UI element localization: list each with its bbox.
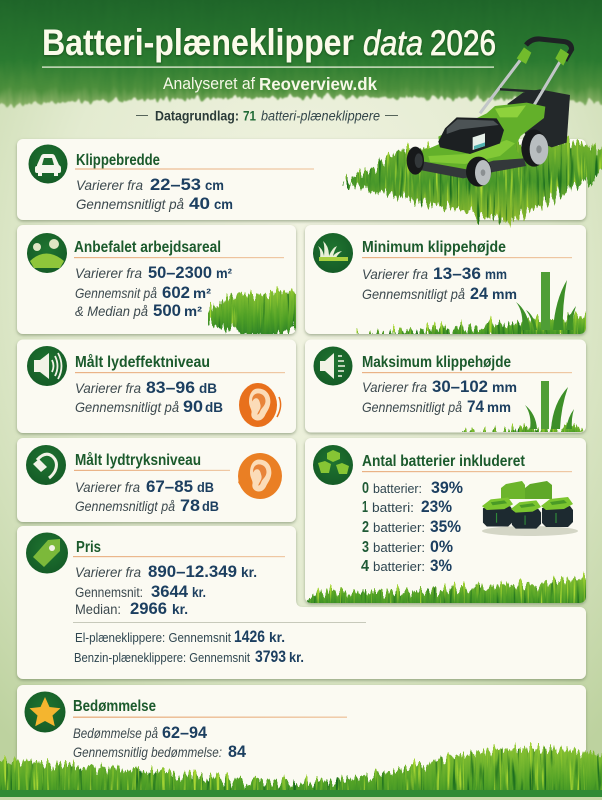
icon: orange ear <box>239 383 281 427</box>
range row <box>73 723 208 742</box>
title: Batteri-plæneklipper <box>42 22 354 63</box>
range row <box>75 378 217 397</box>
average row <box>75 397 223 416</box>
subtitle <box>163 74 377 94</box>
average row <box>362 397 511 416</box>
icon: batteries <box>313 445 353 485</box>
title: 2026 <box>430 24 496 63</box>
subtitle: Reoverview.dk <box>259 74 377 94</box>
average row: dB <box>202 498 219 514</box>
data basis line: Datagrundlag: <box>155 108 239 124</box>
range row <box>75 263 232 282</box>
petrol mower price: 3793 <box>255 647 286 666</box>
icon: speaker with bars <box>314 346 352 386</box>
range row: kr. <box>241 564 257 580</box>
range row: m² <box>216 265 232 281</box>
bottom ground strip <box>0 790 602 797</box>
average row: 90 <box>183 397 203 416</box>
range row: 50–2300 <box>148 263 212 282</box>
average row: Gennemsnitligt på <box>75 498 175 514</box>
row: 1 battery: batteri: <box>372 500 414 515</box>
median row <box>75 599 188 618</box>
body <box>417 103 545 173</box>
average row: 24 <box>470 284 489 303</box>
range row: mm <box>485 266 507 282</box>
average row: Gennemsnitligt på <box>362 286 465 302</box>
range row: Bedømmelse på <box>73 725 158 741</box>
petrol mower price <box>74 647 304 666</box>
icon: price tag <box>26 532 68 574</box>
data basis line: batteri-plæneklippere <box>261 108 380 124</box>
average row <box>76 194 233 213</box>
row: 0 batteries: 0 <box>362 480 369 497</box>
rear wheel <box>521 129 548 167</box>
icon: lawn <box>27 233 67 273</box>
median row: kr. <box>172 601 188 617</box>
average row: Gennemsnitlig bedømmelse: <box>73 744 222 760</box>
range row: Varierer fra <box>76 177 143 193</box>
average row: Gennemsnitligt på <box>362 399 462 415</box>
average row: Gennemsnit på <box>75 285 157 301</box>
average row: 3644 <box>151 582 189 601</box>
range row: Varierer fra <box>75 265 142 281</box>
row: 4 batteries: 3% <box>430 556 452 575</box>
average row: 74 <box>467 397 484 416</box>
icon: ear <box>26 445 66 485</box>
row: 3 batteries: batterier: <box>373 540 425 555</box>
panel: minimum klippehøjde <box>305 225 600 340</box>
range row <box>75 477 214 496</box>
range row: 890–12.349 <box>148 562 237 581</box>
data basis line <box>136 108 398 124</box>
row: 1 battery: 23% <box>421 497 452 516</box>
panel: antal batterier <box>300 438 600 612</box>
average row: Gennemsnit: <box>75 585 143 600</box>
illustration: grass strip <box>306 572 586 603</box>
heading: Målt lydeffektniveau <box>75 354 210 371</box>
range row: Varierer fra <box>75 479 140 495</box>
range row: Varierer fra <box>75 564 141 580</box>
grass patch <box>344 140 602 222</box>
row: 3 batteries: 3 <box>362 539 369 556</box>
range row: dB <box>197 479 214 495</box>
average row: cm <box>214 196 233 212</box>
illustration: grass and ruler <box>356 272 586 334</box>
heading: Bedømmelse <box>73 698 156 715</box>
illustration: grass block <box>207 292 300 336</box>
range row: 67–85 <box>146 477 193 496</box>
grass bag <box>507 89 570 147</box>
range row: 22–53 <box>150 175 201 194</box>
illustration: mower on grass <box>344 39 602 222</box>
panel: målt lydeffektniveau <box>17 340 296 433</box>
median row: Median: <box>75 602 121 617</box>
range row <box>362 377 517 396</box>
electric mower price: kr. <box>269 629 285 645</box>
illustration: battery stack <box>482 481 578 536</box>
average row <box>75 496 219 515</box>
row: 4 batteries <box>361 556 452 575</box>
range row: Varierer fra <box>75 380 141 396</box>
average row: 78 <box>180 496 200 515</box>
icon: speaker <box>27 346 67 386</box>
average row <box>75 582 206 601</box>
range row: cm <box>205 177 224 193</box>
average row: mm <box>492 286 517 302</box>
heading: Antal batterier inkluderet <box>362 453 525 470</box>
range row: dB <box>199 380 217 396</box>
petrol mower price: Benzin-plæneklippere: Gennemsnit <box>74 650 250 665</box>
panel: målt lydtryksniveau <box>17 438 296 522</box>
row: 0 batteries: 39% <box>431 478 463 497</box>
median row: m² <box>184 303 202 319</box>
electric mower price: El-plæneklippere: Gennemsnit <box>75 630 231 645</box>
petrol mower price: kr. <box>289 649 304 665</box>
row: 2 batteries: batterier: <box>373 520 425 535</box>
row: 1 battery <box>362 497 452 516</box>
row: 0 batteries: batterier: <box>373 481 422 496</box>
median row <box>75 301 202 320</box>
panel: klippebredde <box>17 139 586 220</box>
data basis line: 71 <box>243 108 256 124</box>
row: 3 batteries: 0% <box>430 537 453 556</box>
panel: anbefalet arbejdsareal <box>17 225 300 336</box>
row: 4 batteries: 4 <box>361 558 369 575</box>
electric mower price: 1426 <box>234 627 265 646</box>
heading: Målt lydtryksniveau <box>75 452 201 469</box>
icon: orange ear <box>238 453 282 499</box>
range row: mm <box>492 379 517 395</box>
range row: 83–96 <box>146 378 195 397</box>
row: 4 batteries: batterier: <box>373 559 425 574</box>
average row: kr. <box>192 584 206 600</box>
average row: 602 <box>162 283 190 302</box>
electric mower price <box>75 627 285 646</box>
row: 3 batteries <box>362 537 453 556</box>
average row: m² <box>193 285 211 301</box>
subtitle: Analyseret af <box>163 75 255 93</box>
row: 2 batteries: 2 <box>362 519 369 536</box>
range row <box>362 264 507 283</box>
mower <box>407 39 572 187</box>
header green band <box>0 0 602 106</box>
median row: 500 <box>153 301 181 320</box>
average row: Gennemsnitligt på <box>75 399 179 415</box>
range row: Varierer fra <box>362 266 428 282</box>
row: 0 batteries <box>362 478 463 497</box>
panel: maksimum klippehøjde <box>305 340 600 440</box>
range row <box>75 562 257 581</box>
left front wheel <box>407 147 424 175</box>
range row: 13–36 <box>433 264 481 283</box>
heading: Maksimum klippehøjde <box>362 354 511 371</box>
heading: Klippebredde <box>76 152 160 169</box>
average row: 40 <box>189 194 210 213</box>
icon: grass tuft <box>313 233 353 273</box>
illustration: grass and ruler <box>462 381 586 432</box>
average row: dB <box>205 399 223 415</box>
title: data <box>363 24 423 63</box>
range row: 30–102 <box>432 377 488 396</box>
right front wheel <box>466 157 491 187</box>
row: 2 batteries <box>362 517 461 536</box>
range row <box>76 175 224 194</box>
row: 2 batteries: 35% <box>430 517 461 536</box>
battery cover <box>438 117 504 154</box>
icon: star <box>24 692 66 732</box>
average row <box>362 284 517 303</box>
average row <box>75 283 211 302</box>
median row: & Median på <box>75 303 148 319</box>
heading: Anbefalet arbejdsareal <box>74 239 221 256</box>
average row: mm <box>487 399 511 415</box>
heading: Pris <box>76 539 101 556</box>
panel: bedømmelse <box>17 685 586 790</box>
range row: Varierer fra <box>362 379 427 395</box>
handle bars <box>480 58 560 132</box>
average row: Gennemsnitligt på <box>76 196 184 212</box>
range row: 62–94 <box>162 723 208 742</box>
heading: Minimum klippehøjde <box>362 239 506 256</box>
icon: mower deck <box>28 144 68 184</box>
panel: pris <box>17 526 586 679</box>
average row: 84 <box>228 742 247 761</box>
row: 1 battery: 1 <box>362 499 368 516</box>
foreground grass <box>0 748 602 800</box>
median row: 2966 <box>130 599 167 618</box>
chassis skirt <box>418 158 526 178</box>
